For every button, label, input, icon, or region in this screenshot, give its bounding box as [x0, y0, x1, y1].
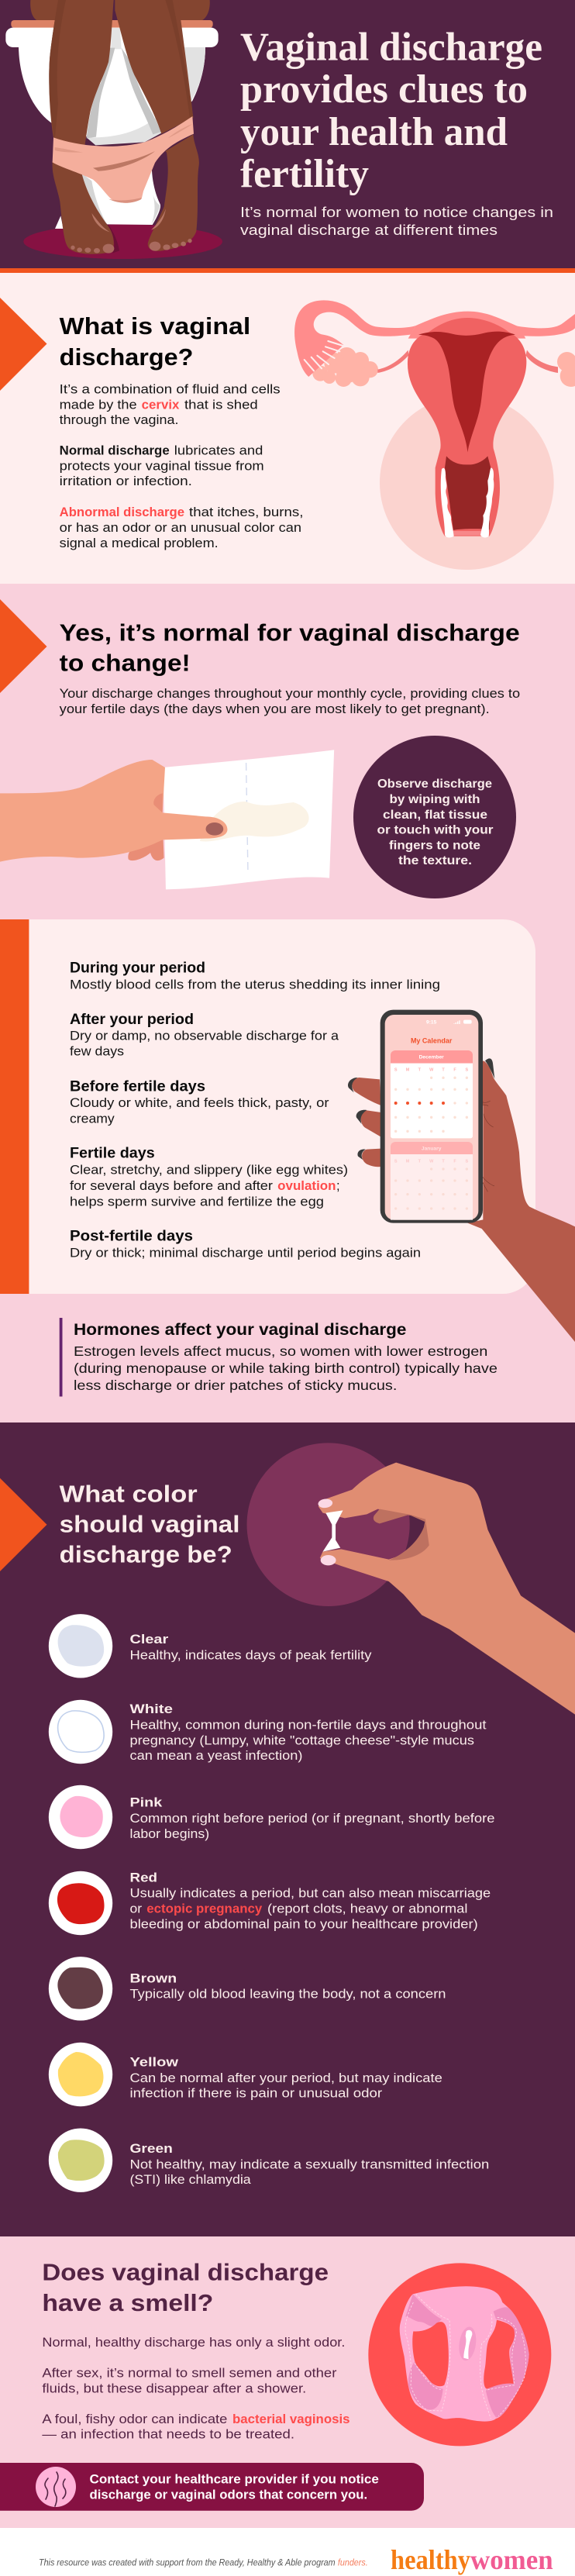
color item: green: Green: [130, 2141, 173, 2156]
phone with calendar: January: [422, 1146, 442, 1151]
color item: clear: Clear: [130, 1632, 169, 1647]
color item: brown: [49, 1957, 446, 2020]
color item: green: [49, 2129, 489, 2192]
credit line: funders.: [338, 2559, 368, 2568]
text block: abnormal discharge: signal a medical problem.: [60, 536, 219, 550]
callout: hormones: less discharge or drier patches of sticky mucus.: [74, 1378, 397, 1393]
text block: intro: [60, 687, 520, 716]
color item: brown: Typically old blood leaving the body, not a concern: [130, 1988, 446, 2002]
text block: normal discharge: [60, 443, 264, 488]
heading: Yes, it’s normal for vaginal discharge: [60, 619, 520, 647]
after your period: Dry or damp, no observable discharge for a: [70, 1029, 339, 1043]
phone with calendar: W: [429, 1160, 434, 1164]
fertile days: ovulation: [277, 1179, 336, 1193]
during your period: Mostly blood cells from the uterus shedding its inner lining: [70, 978, 440, 991]
text block: odor: — an infection that needs to be treated.: [42, 2428, 294, 2442]
phone with calendar: T: [418, 1160, 422, 1164]
text block: intro: Your discharge changes throughout your monthly cycle, providing clues to: [60, 687, 520, 701]
color item: green: Not healthy, may indicate a sexually transmitted infection: [130, 2157, 489, 2171]
phone with calendar: F: [453, 1160, 456, 1164]
illustration: underwear: [368, 2263, 551, 2446]
callout: observe discharge: or touch with your: [377, 824, 493, 837]
fertile days: Clear, stretchy, and slippery (like egg whites): [70, 1163, 348, 1177]
text block: odor: After sex, it’s normal to smell semen and other: [42, 2367, 337, 2381]
before fertile days: Before fertile days: [70, 1078, 205, 1095]
text block: odor: A foul, fishy odor can indicate: [42, 2412, 227, 2426]
heading: discharge be?: [60, 1541, 232, 1568]
post-fertile days: Post-fertile days: [70, 1229, 193, 1245]
color item: red: bleeding or abdominal pain to your healthcare provider): [130, 1917, 478, 1931]
credit line: This resource was created with support from the Ready, Healthy & Able program: [39, 2559, 336, 2568]
title: your health and: [240, 110, 508, 154]
color item: white: pregnancy (Lumpy, white "cottage cheese"-style mucus: [130, 1733, 474, 1747]
text block: definition: that is shed: [184, 398, 258, 412]
panel: what color: [0, 1422, 575, 2236]
footer: [0, 2528, 575, 2576]
fertile days: helps sperm survive and fertilize the egg: [70, 1195, 324, 1209]
callout: observe discharge: clean, flat tissue: [383, 809, 487, 822]
callout: observe discharge: by wiping with: [389, 793, 480, 806]
phone with calendar: M: [406, 1068, 410, 1073]
text block: abnormal discharge: [60, 505, 303, 550]
callout: observe discharge: the texture.: [398, 854, 472, 867]
heading: [60, 619, 520, 677]
color item: white: Healthy, common during non-fertile days and throughout: [130, 1718, 487, 1732]
panel: header: [0, 0, 575, 273]
color item: pink: Common right before period (or if pregnant, shortly before: [130, 1812, 494, 1826]
color item: red: or: [130, 1902, 143, 1916]
color item: white: [49, 1700, 487, 1764]
fertile days: Fertile days: [70, 1146, 155, 1161]
color item: white: White: [130, 1702, 173, 1716]
after your period: [70, 1012, 339, 1059]
callout: observe discharge: Observe discharge: [377, 778, 492, 791]
heading: [60, 312, 250, 371]
text block: abnormal discharge: Abnormal discharge: [60, 505, 184, 519]
arrow: [0, 298, 46, 391]
phone with calendar: 9:15: [426, 1020, 437, 1026]
color item: red: Red: [130, 1870, 157, 1885]
illustration: uterus: [294, 300, 575, 570]
fertile days: [70, 1146, 348, 1209]
title: Vaginal discharge: [240, 25, 542, 70]
color item: pink: [49, 1785, 495, 1849]
color item: pink: labor begins): [130, 1827, 209, 1841]
phone with calendar: [380, 1010, 483, 1223]
illustration: fingers stretching mucus: [247, 1443, 575, 1715]
text block: normal discharge: Normal discharge: [60, 443, 170, 457]
color item: red: [49, 1870, 491, 1935]
during your period: [70, 960, 440, 991]
panel: smell: [0, 2236, 575, 2528]
post-fertile days: [70, 1229, 421, 1260]
callout: contact provider banner: discharge or vaginal odors that concern you.: [90, 2487, 367, 2502]
subtitle: [240, 204, 553, 238]
color item: clear: Healthy, indicates days of peak fertility: [130, 1649, 372, 1663]
panel: what is vaginal discharge: [0, 273, 575, 584]
text block: definition: through the vagina.: [60, 413, 178, 427]
text block: definition: It’s a combination of fluid and cells: [60, 383, 281, 397]
color item: brown: Brown: [130, 1971, 177, 1985]
color item: yellow: Can be normal after your period, but may indicate: [130, 2071, 442, 2085]
color item: green: (STI) like chlamydia: [130, 2173, 252, 2187]
phone with calendar: My Calendar: [411, 1037, 453, 1045]
panel: cycle stages: [0, 919, 535, 1294]
callout: observe discharge: fingers to note: [389, 840, 480, 853]
text block: definition: cervix: [142, 398, 180, 412]
phone with calendar: S: [465, 1068, 468, 1073]
text block: normal discharge: protects your vaginal tissue from: [60, 459, 264, 473]
arrow: [0, 599, 46, 693]
illustration: hand holding phone: [348, 1010, 575, 1342]
fertile days: ;: [336, 1179, 340, 1193]
heading: [60, 1480, 240, 1568]
heading: What color: [60, 1480, 198, 1507]
text block: abnormal discharge: or has an odor or an unusual color can: [60, 521, 301, 535]
heading: Does vaginal discharge: [42, 2259, 329, 2286]
title: provides clues to: [240, 67, 528, 112]
text block: odor: [42, 2336, 350, 2442]
post-fertile days: Dry or thick; minimal discharge until period begins again: [70, 1247, 421, 1260]
during your period: During your period: [70, 960, 205, 977]
callout: hormones: Estrogen levels affect mucus, so women with lower estrogen: [74, 1343, 487, 1359]
logo: healthywomen: women: [470, 2544, 553, 2575]
before fertile days: Cloudy or white, and feels thick, pasty, or: [70, 1096, 329, 1110]
text block: abnormal discharge: that itches, burns,: [189, 505, 303, 519]
heading: What is vaginal: [60, 312, 250, 340]
phone with calendar: T: [442, 1068, 445, 1073]
callout: hormones: Hormones affect your vaginal discharge: [74, 1320, 406, 1339]
text block: definition: made by the: [60, 398, 137, 412]
phone with calendar: December: [419, 1054, 444, 1060]
color item: clear: [49, 1614, 372, 1678]
panel: normal to change: [0, 584, 575, 1422]
heading: [42, 2259, 329, 2316]
logo: healthywomen: healthy: [391, 2544, 470, 2575]
heading: to change!: [60, 650, 191, 677]
color item: white: can mean a yeast infection): [130, 1749, 302, 1763]
color item: yellow: Yellow: [130, 2055, 179, 2070]
text block: odor: bacterial vaginosis: [232, 2412, 350, 2426]
text block: normal discharge: lubricates and: [174, 443, 263, 457]
callout: hormones: [60, 1318, 498, 1397]
color item: red: ectopic pregnancy: [146, 1902, 263, 1916]
phone with calendar: M: [406, 1160, 410, 1164]
text block: intro: your fertile days (the days when you are most likely to get pregnant).: [60, 702, 490, 716]
color item: red: Usually indicates a period, but can also mean miscarriage: [130, 1887, 491, 1901]
before fertile days: [70, 1078, 329, 1126]
heading: discharge?: [60, 343, 193, 371]
callout: observe discharge: [353, 736, 516, 898]
callout: contact provider banner: Contact your healthcare provider if you notice: [90, 2472, 379, 2487]
subtitle: vaginal discharge at different times: [240, 222, 498, 238]
callout: hormones: (during menopause or while taking birth control) typically have: [74, 1360, 498, 1376]
before fertile days: creamy: [70, 1112, 115, 1126]
phone with calendar: T: [442, 1160, 445, 1164]
arrow: [0, 1478, 46, 1571]
phone with calendar: F: [453, 1068, 456, 1073]
phone with calendar: S: [465, 1160, 468, 1164]
phone with calendar: W: [429, 1068, 434, 1073]
heading: have a smell?: [42, 2289, 213, 2316]
subtitle: It’s normal for women to notice changes in: [240, 204, 553, 220]
heading: should vaginal: [60, 1511, 240, 1538]
icon: odor waves: [36, 2467, 76, 2507]
title: [240, 25, 542, 196]
text block: odor: Normal, healthy discharge has only a slight odor.: [42, 2336, 345, 2350]
title: fertility: [240, 152, 369, 196]
text block: definition: [60, 383, 281, 427]
logo: healthywomen: [391, 2544, 553, 2575]
color item: pink: Pink: [130, 1795, 163, 1810]
text block: odor: fluids, but these disappear after a shower.: [42, 2381, 306, 2395]
color item: red: (report clots, heavy or abnormal: [267, 1902, 467, 1916]
after your period: few days: [70, 1045, 124, 1059]
text block: normal discharge: irritation or infection.: [60, 474, 192, 488]
fertile days: for several days before and after: [70, 1179, 274, 1193]
phone with calendar: S: [394, 1068, 398, 1073]
after your period: After your period: [70, 1012, 194, 1028]
callout: contact provider banner: [0, 2463, 424, 2511]
color item: yellow: infection if there is pain or unusual odor: [130, 2087, 383, 2101]
phone with calendar: T: [418, 1068, 422, 1073]
phone with calendar: S: [394, 1160, 398, 1164]
illustration: legs and toilet: [5, 0, 222, 259]
illustration: hand with tissue: [0, 750, 334, 889]
color item: yellow: [49, 2043, 442, 2106]
